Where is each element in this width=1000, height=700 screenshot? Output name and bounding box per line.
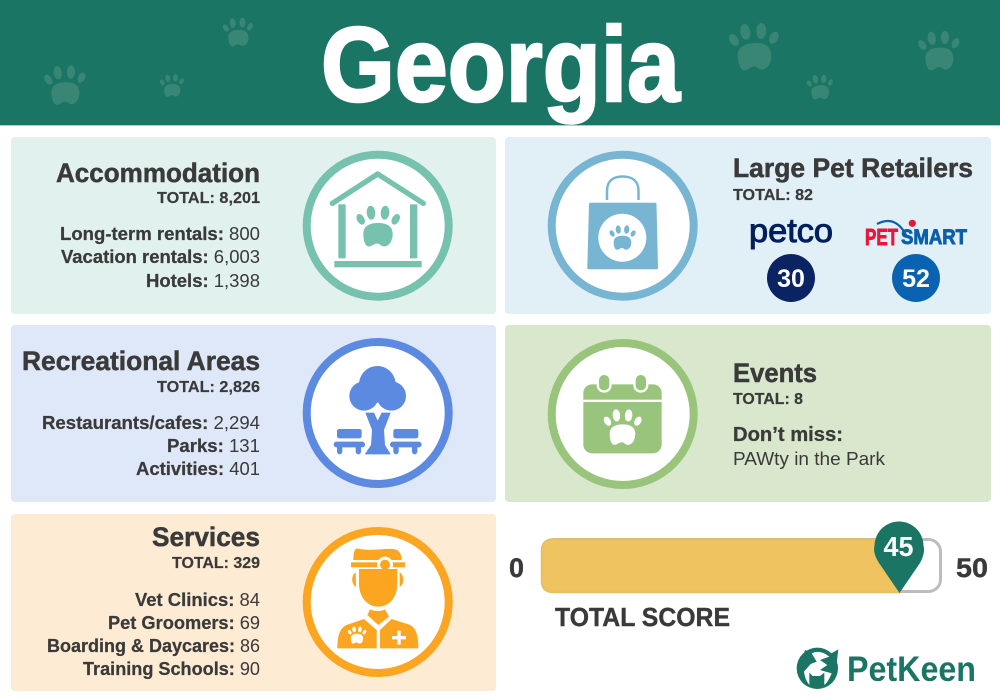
heading: large pet retailers: Large Pet Retailers: [733, 153, 973, 183]
logo mark: [797, 648, 838, 689]
heading: recreational areas: Recreational Areas: [22, 346, 260, 376]
panel: recreational areas: [11, 325, 496, 502]
list: services: Training Schools: 90: [83, 659, 260, 679]
list: recreational areas: Activities: 401: [136, 459, 260, 479]
score marker pin: 45: [884, 531, 914, 562]
heading: events: Events: [733, 358, 817, 388]
score marker pin: [874, 522, 924, 593]
icon: tree and benches: [307, 342, 449, 484]
list: accommodation: [60, 224, 260, 291]
decorative paw prints: [42, 17, 963, 106]
list: services: [47, 590, 260, 679]
logo: petco: petco: [749, 212, 833, 249]
badge: petsmart count: [892, 254, 940, 302]
logo: pet keen: [797, 648, 976, 689]
title: Georgia: [321, 6, 681, 124]
logo: petsmart: SMART: [901, 226, 967, 249]
heading: accommodation: Accommodation: [56, 158, 260, 188]
total: accommodation: TOTAL: 8,201: [157, 190, 260, 207]
icon: calendar: [552, 343, 694, 485]
logo: petsmart: [865, 220, 967, 250]
list: recreational areas: Parks: 131: [167, 436, 260, 456]
badge: petsmart count: 52: [902, 265, 930, 293]
icon: pet house: [307, 155, 449, 297]
panel: events: [505, 325, 991, 502]
icon: veterinarian: [307, 531, 449, 673]
list: accommodation: Long-term rentals: 800: [60, 224, 260, 244]
logo wordmark: PetKeen: [847, 650, 976, 689]
score bar: [542, 539, 940, 592]
list: accommodation: Hotels: 1,398: [146, 271, 260, 291]
total: large pet retailers: TOTAL: 82: [733, 187, 813, 204]
subheading: don't miss: Don’t miss:: [733, 424, 843, 446]
badge: petco count: [767, 254, 815, 302]
panel: accommodation: [11, 137, 496, 314]
event name: PAWty in the Park: [733, 449, 886, 469]
total: events: TOTAL: 8: [733, 391, 803, 408]
badge: petco count: 30: [777, 265, 805, 293]
list: services: Pet Groomers: 69: [108, 613, 260, 633]
header banner: [0, 0, 1000, 126]
list: accommodation: Vacation rentals: 6,003: [61, 247, 260, 267]
total: services: TOTAL: 329: [172, 555, 260, 572]
logo: petsmart: PET: [865, 224, 898, 250]
total: recreational areas: TOTAL: 2,826: [157, 379, 260, 396]
panel: services: [11, 514, 496, 691]
heading: services: Services: [152, 522, 260, 552]
label: total score: TOTAL SCORE: [555, 602, 730, 632]
list: services: Boarding & Daycares: 86: [47, 636, 260, 656]
score gauge: [509, 522, 988, 632]
scale maximum: 50: [956, 553, 988, 583]
scale minimum: 0: [509, 553, 524, 583]
panel: large pet retailers: [505, 137, 991, 314]
list: services: Vet Clinics: 84: [135, 590, 260, 610]
list: recreational areas: Restaurants/cafes: 2,294: [42, 413, 260, 433]
icon: shopping bag: [552, 155, 694, 297]
list: recreational areas: [42, 413, 260, 479]
